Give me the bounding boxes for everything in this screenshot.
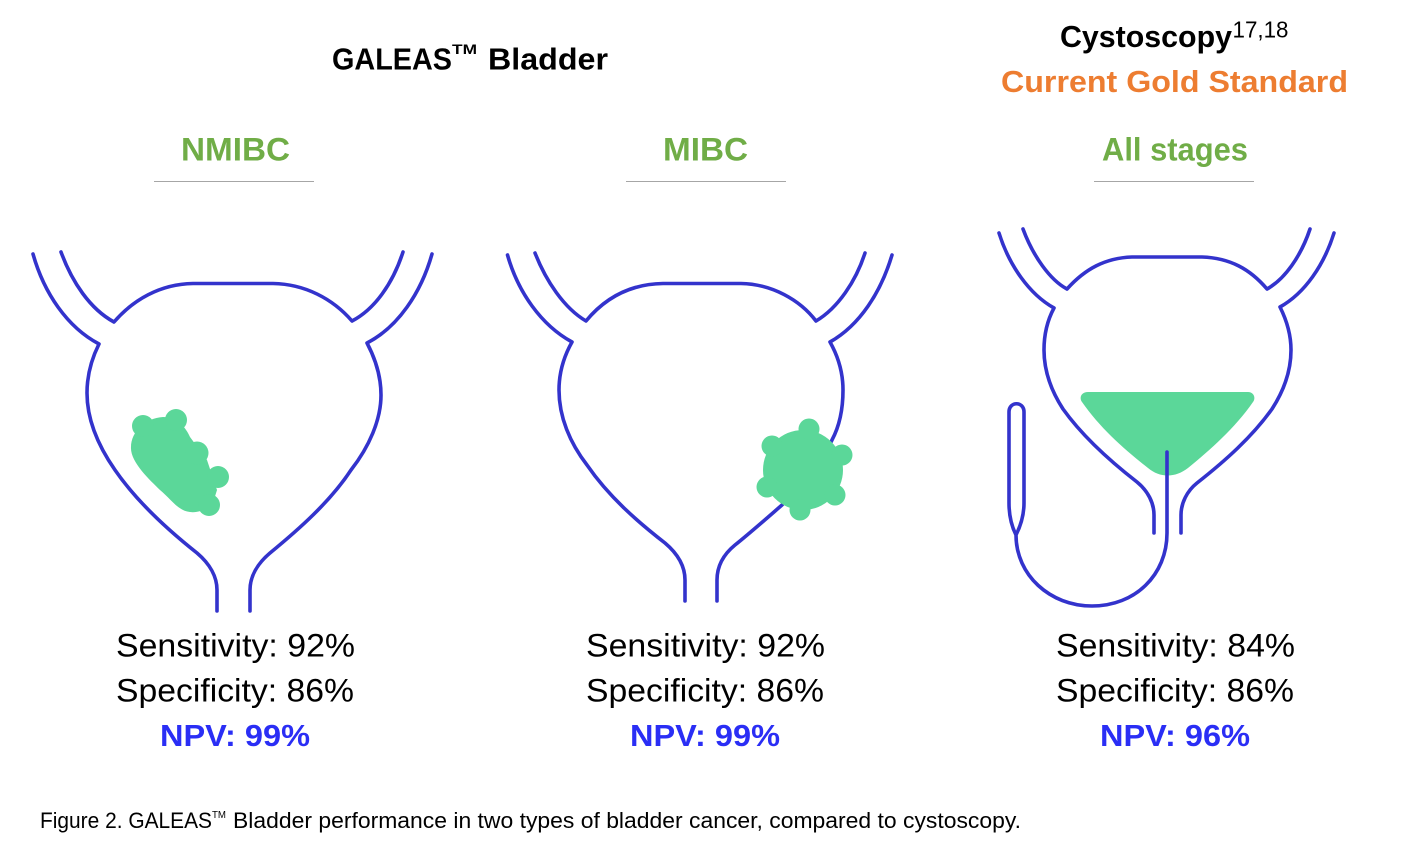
stats: All stages	[1056, 628, 1295, 753]
heading: MIBC: MIBC	[663, 132, 748, 168]
cystoscope	[1009, 404, 1167, 606]
tumour: NMIBC	[131, 409, 229, 516]
caption: Bladder performance in two types of bladder cancer, compared to cystoscopy.	[233, 808, 1021, 833]
stats: All stages: Sensitivity: 84%	[1056, 628, 1295, 664]
heading: All stages: All stages	[1102, 132, 1248, 168]
title: GALEAS Bladder	[332, 41, 608, 76]
caption: TM	[212, 810, 226, 821]
stats: NMIBC: Specificity: 86%	[116, 672, 354, 708]
heading: NMIBC: NMIBC	[181, 132, 290, 168]
title: GALEAS Bladder: Bladder	[488, 42, 608, 76]
stats: All stages: Specificity: 86%	[1056, 672, 1294, 708]
stats: NMIBC	[116, 628, 355, 753]
fluid	[1081, 392, 1254, 476]
stats: MIBC: Sensitivity: 92%	[586, 628, 825, 664]
title: GALEAS Bladder: TM	[452, 41, 477, 57]
diagram: MIBC bladder	[508, 253, 892, 601]
title: Cystoscopy: 17,18	[1232, 16, 1288, 42]
stats: MIBC	[586, 628, 825, 753]
stats: All stages: NPV: 96%	[1100, 718, 1250, 753]
subtitle: Current Gold Standard: Current Gold Standard	[1001, 64, 1348, 99]
stats: MIBC: Specificity: 86%	[586, 672, 824, 708]
stats: NMIBC: Sensitivity: 92%	[116, 628, 355, 664]
diagram: NMIBC bladder	[33, 252, 432, 611]
tumour: MIBC	[756, 418, 852, 520]
caption: Figure 2. GALEAS	[40, 808, 212, 833]
stats: NMIBC: NPV: 99%	[160, 718, 310, 753]
title: Cystoscopy: Cystoscopy	[1060, 19, 1233, 54]
stats: MIBC: NPV: 99%	[630, 718, 780, 753]
title: GALEAS Bladder: GALEAS	[332, 42, 452, 76]
diagram: cystoscopy bladder	[999, 229, 1334, 606]
